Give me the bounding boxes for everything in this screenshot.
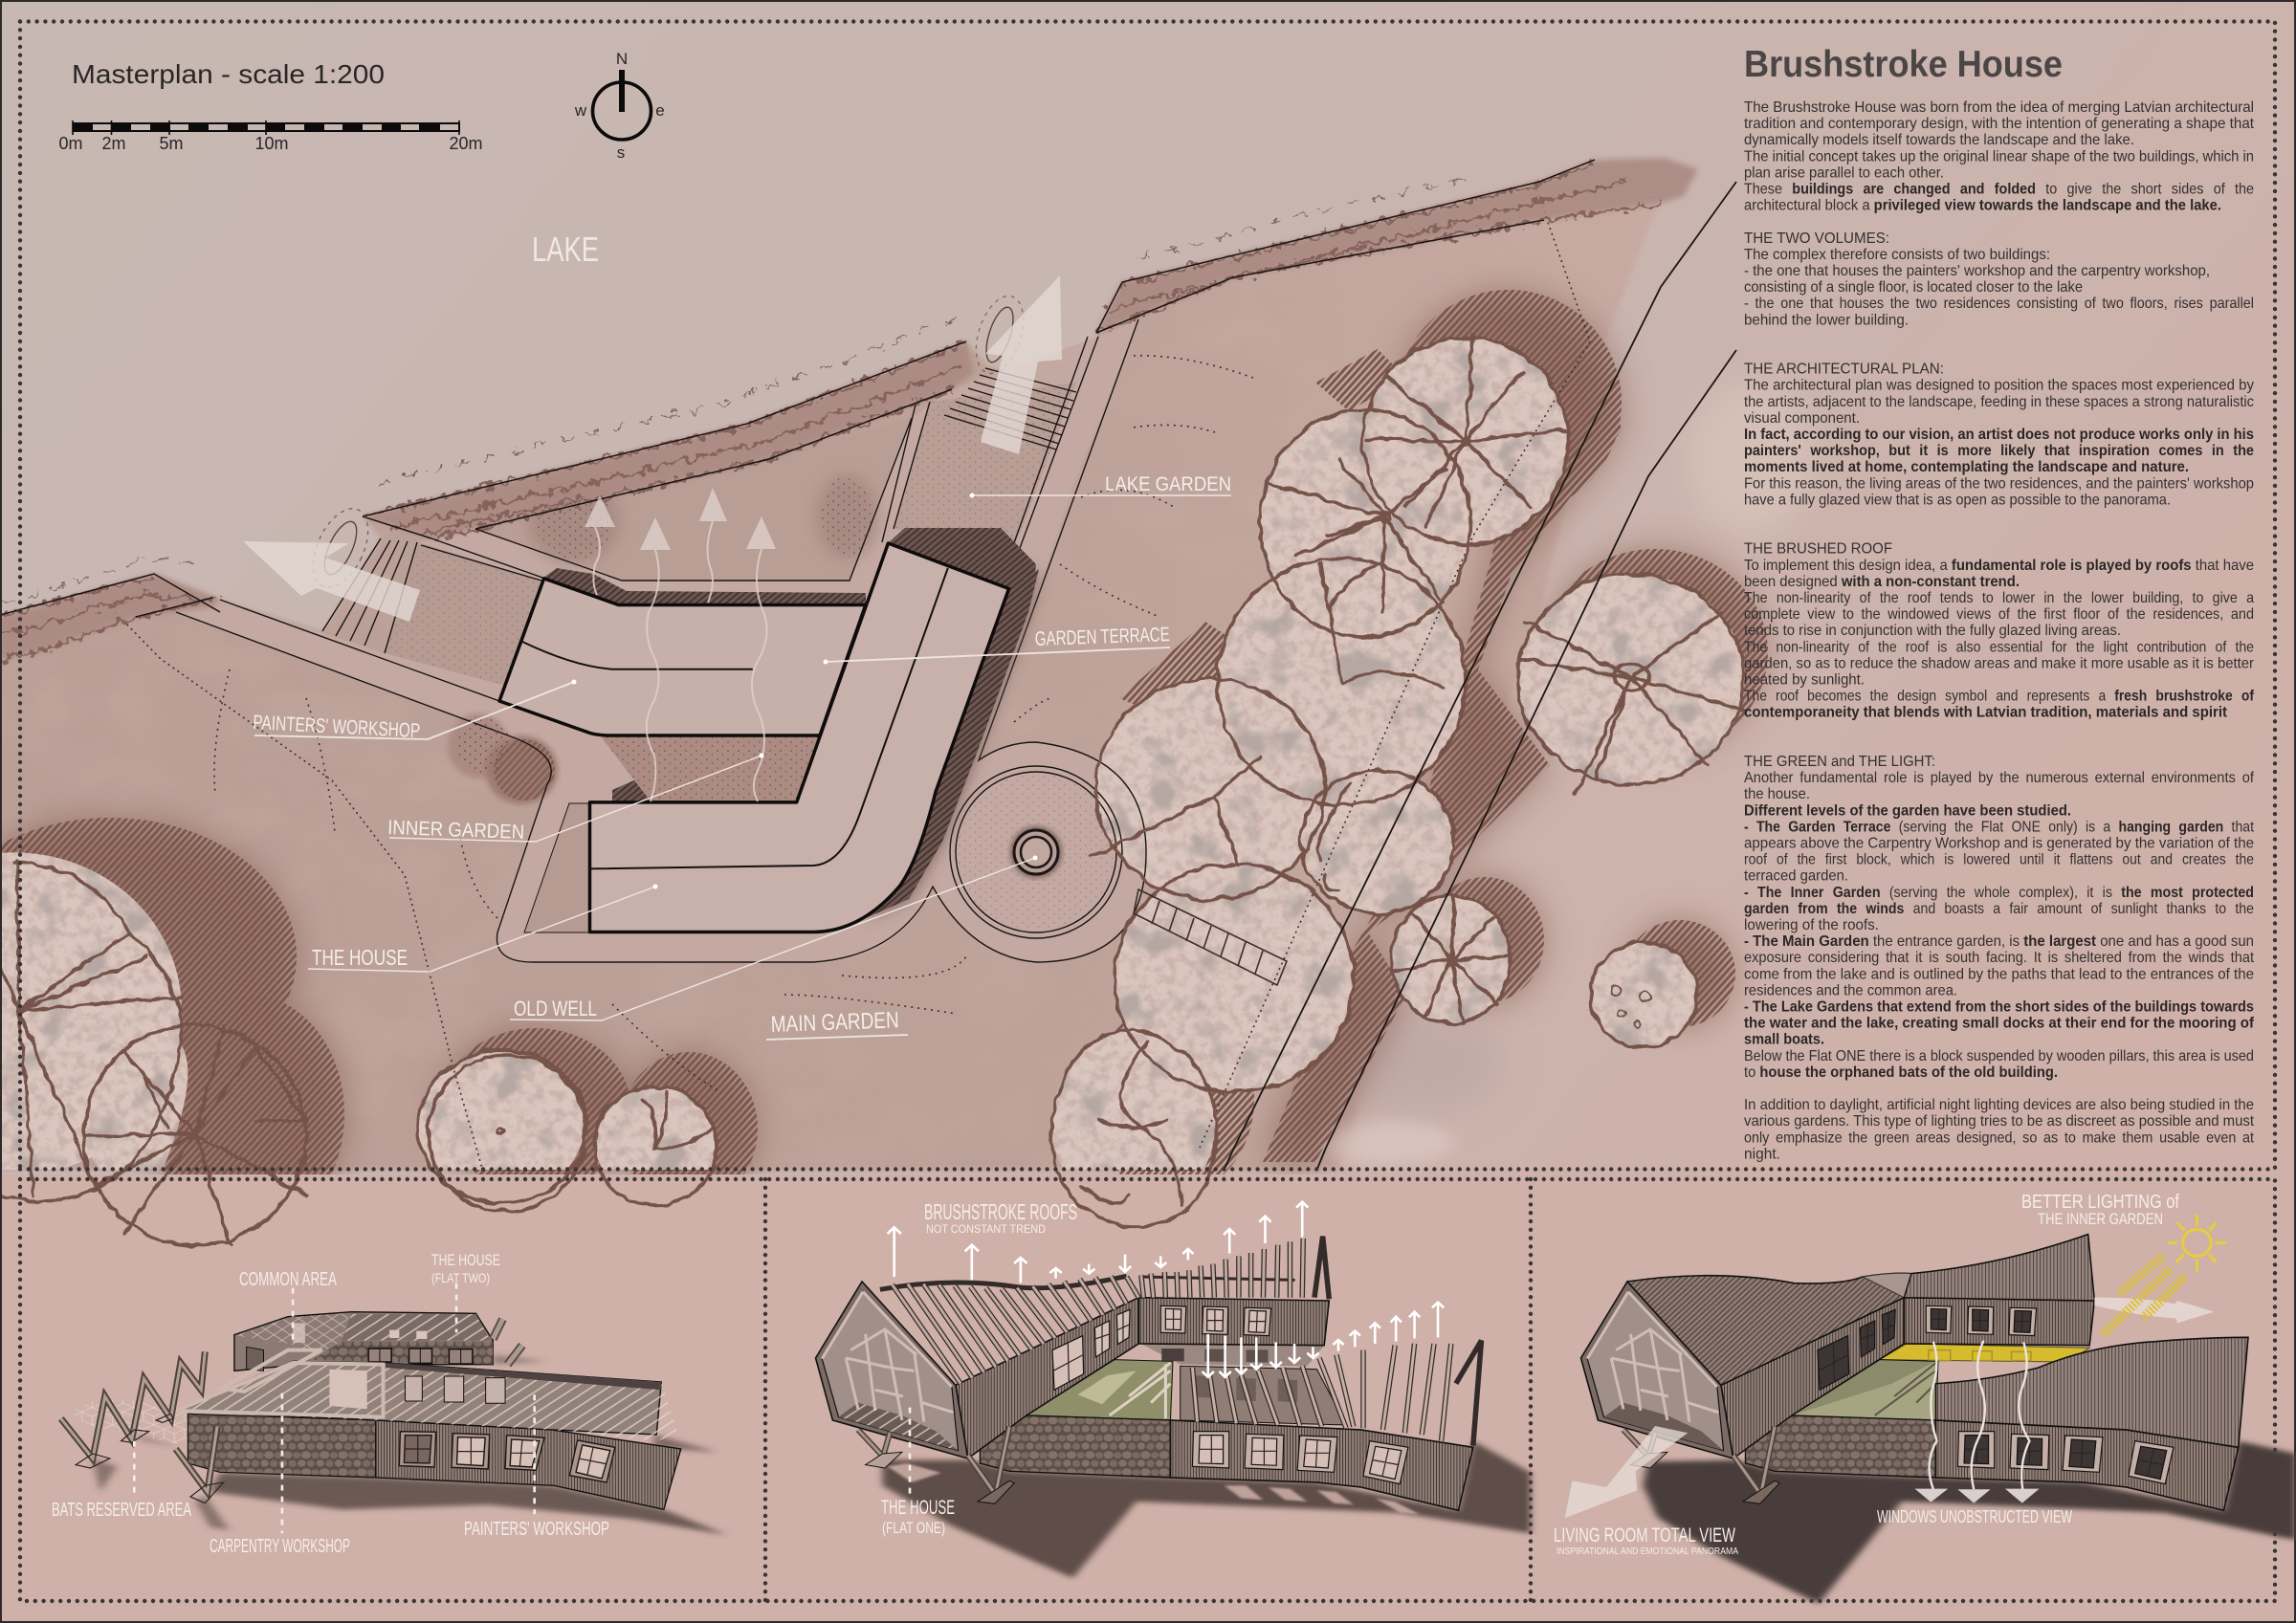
text block: introduction: architectural block a privileged view towards the landscape and the lake. — [1744, 198, 2221, 214]
label: living room total view — [1554, 1524, 1738, 1557]
panel: roof structure — [816, 1199, 1531, 1578]
windows — [399, 1432, 615, 1482]
scale bar: 0m — [58, 134, 83, 153]
label: common area: COMMON AREA — [239, 1269, 337, 1290]
label: bats reserved area: BATS RESERVED AREA — [52, 1500, 191, 1521]
panel: functional axonometric — [52, 1251, 727, 1557]
text block: introduction: The Brushstroke House was born from the idea of merging Latvian architectural — [1744, 99, 2254, 116]
label: lake: LAKE — [532, 230, 599, 269]
text block: the architectural plan: visual component. — [1744, 410, 1860, 427]
label: lake garden: LAKE GARDEN — [1105, 473, 1231, 495]
text block: the two volumes: behind the lower building. — [1744, 312, 1909, 328]
text block: the green and the light: - The Main Garden the entrance garden, is the largest one and has a good sun — [1744, 933, 2254, 950]
bat area hex floor — [68, 1399, 230, 1444]
text block: the architectural plan: the artists, adjacent to the landscape, feeding in these spaces a strong naturalistic — [1744, 394, 2254, 410]
scale bar: 20m — [449, 134, 483, 153]
walls — [1581, 1282, 2239, 1510]
right trees — [1392, 574, 1744, 1047]
text block: the brushed roof: tends to rise in conjunction with the fully glazed living areas. — [1744, 623, 2121, 639]
ground shadow — [1643, 1441, 2296, 1604]
text block: the two volumes: - the one that houses the two residences consisting of two floors, rises parallel — [1744, 296, 2254, 312]
gable floor hatch — [839, 1403, 959, 1451]
label: the house flat two: THE HOUSE — [431, 1251, 500, 1269]
axonometric drawing 2 — [816, 1202, 1531, 1578]
text block: the brushed roof: The roof becomes the design symbol and represents a fresh brushstroke of — [1744, 689, 2255, 705]
label: inner garden: INNER GARDEN — [387, 817, 525, 844]
title: masterplan: Masterplan - scale 1:200 — [72, 59, 385, 89]
label: the house flat two — [431, 1251, 500, 1285]
the house roof — [589, 543, 1009, 932]
text block: the architectural plan: THE ARCHITECTURAL PLAN: — [1744, 362, 1944, 378]
painters' workshop roof — [499, 579, 866, 735]
text block: the two volumes: - the one that houses the painters' workshop and the carpentry workshop, — [1744, 263, 2210, 279]
lake garden washes and bushes — [448, 418, 912, 804]
label: garden terrace — [823, 624, 1170, 664]
label: inner garden — [387, 754, 763, 844]
stone wall and corrugated wall — [188, 1414, 376, 1478]
label: old well: OLD WELL — [514, 997, 597, 1020]
tree foliage — [0, 338, 1744, 1170]
view triangles and wavy lines — [585, 488, 776, 801]
text block: the architectural plan: have a fully glazed view that is as open as possible to the panorama. — [1744, 492, 2171, 508]
panel: light and views — [1554, 1192, 2296, 1604]
roof trend arrows — [888, 1202, 1444, 1377]
label: brushstroke roofs: BRUSHSTROKE ROOFS — [924, 1199, 1077, 1224]
icon: compass: e — [655, 101, 665, 120]
text block: the brushed roof — [1744, 541, 2255, 721]
label: windows unobstructed view: WINDOWS UNOBSTRUCTED VIEW — [1877, 1507, 2072, 1526]
text block: introduction: tradition and contemporary design, with the intention of generating a shape that — [1744, 116, 2255, 132]
soft washes — [1330, 1009, 1502, 1114]
label: the house: THE HOUSE — [312, 945, 408, 970]
scribbled waterline — [0, 177, 1473, 604]
label: painters' workshop — [253, 679, 576, 742]
text block: the brushed roof: been designed with a non-constant trend. — [1744, 574, 2020, 590]
left trees — [0, 861, 717, 1245]
light flow arrow — [2094, 1298, 2214, 1323]
text block: the architectural plan: For this reason, the living areas of the two residences, and the painters' workshop — [1744, 475, 2254, 492]
text block: the architectural plan: moments lived at home, contemplating the landscape and nature. — [1744, 459, 2189, 475]
icon: compass: s — [617, 143, 625, 162]
label: painters' workshop: PAINTERS' WORKSHOP — [253, 712, 421, 742]
text block: the green and the light: the water and the lake, creating small docks at their end for the mooring of — [1744, 1016, 2255, 1032]
text block: introduction — [1744, 99, 2255, 214]
icon: compass — [574, 50, 665, 162]
paths and courtyard pads — [176, 319, 1146, 962]
dashed leaders — [134, 1283, 535, 1533]
text block: the architectural plan: The architectural plan was designed to position the spaces most experienced by — [1744, 378, 2254, 394]
scale bar: 5m — [159, 134, 184, 153]
back wall inner — [1181, 1366, 1346, 1425]
text block: the architectural plan: painters' workshop, but it is more likely that inspiration comes in the — [1744, 443, 2254, 459]
label: the house flat one — [881, 1497, 955, 1537]
text block: the green and the light: terraced garden. — [1744, 868, 1848, 885]
back volume — [234, 1312, 522, 1371]
text block: introduction: dynamically models itself towards the landscape and the lake. — [1744, 132, 2134, 148]
tree shadows — [0, 290, 1768, 1234]
text block: the green and the light: - The Lake Gardens that extend from the short sides of the buildings towards — [1744, 998, 2254, 1016]
text block: the green and the light: lowering of the roofs. — [1744, 917, 1879, 933]
label: better lighting: BETTER LIGHTING of — [2021, 1192, 2179, 1213]
text block: the green and the light: Below the Flat ONE there is a block suspended by wooden pillars, this area is used — [1744, 1048, 2254, 1064]
ground shadow — [882, 1441, 1531, 1578]
lake shore vegetation — [0, 158, 1698, 660]
text block: the green and the light — [1744, 754, 2255, 1081]
text block: the green and the light: - The Inner Garden (serving the whole complex), it is the most protected — [1744, 885, 2254, 901]
text block: the green and the light: - The Garden Terrace (serving the Flat ONE only) is a hanging garden that — [1744, 819, 2254, 835]
sun — [2168, 1215, 2226, 1271]
text block: the green and the light: Different levels of the garden have been studied. — [1744, 802, 2071, 819]
text block: introduction: These buildings are changed and folded to give the short sides of the — [1744, 182, 2254, 197]
text block: the green and the light: small boats. — [1744, 1032, 1824, 1048]
bottom strip background — [0, 1174, 2296, 1623]
text block: the brushed roof: contemporaneity that blends with Latvian tradition, materials and spirit — [1744, 705, 2228, 721]
rafters: back wing — [1141, 1237, 1329, 1299]
text block: the two volumes: The complex therefore consists of two buildings: — [1744, 247, 2050, 263]
living room arrow — [1565, 1426, 1688, 1518]
tree outlines — [0, 335, 1744, 1245]
view wavy lines — [1930, 1341, 2029, 1489]
arrow: view from workshop — [243, 541, 420, 622]
label: carpentry workshop: CARPENTRY WORKSHOP — [210, 1536, 350, 1557]
stepping stones — [1134, 889, 1287, 985]
text block: night lighting: night. — [1744, 1146, 1780, 1162]
text block: night lighting: various gardens. This type of lighting tries to be as discreet as possible and must — [1744, 1113, 2255, 1130]
label: lake garden — [970, 473, 1231, 497]
icon: boats — [302, 290, 1032, 596]
back wall, terrace and yellow band — [1880, 1344, 2089, 1362]
label: garden terrace: GARDEN TERRACE — [1034, 624, 1170, 650]
panel: project description — [1744, 44, 2255, 1162]
text block: the brushed roof: garden, so as to reduce the shadow areas and make it more usable as it is better — [1744, 655, 2255, 671]
text block: the green and the light: come from the lake and is outlined by the paths that lead to the entrances of the — [1744, 966, 2254, 982]
dashed leader — [909, 1408, 911, 1499]
text block: the green and the light: to house the orphaned bats of the old building. — [1744, 1064, 2058, 1081]
label: the house — [308, 884, 658, 972]
ground shadow — [93, 1355, 727, 1535]
text block: introduction: plan arise parallel to each other. — [1744, 164, 1944, 181]
dock stairs and path lines — [176, 319, 1146, 962]
sun rays — [2102, 1256, 2185, 1336]
text block: the architectural plan: In fact, according to our vision, an artist does not produce works only in his — [1744, 427, 2254, 443]
text block: the brushed roof: complete view to the windowed views of the first floor of the residences, and — [1744, 606, 2254, 623]
icon: compass: N — [616, 50, 628, 68]
site boundary lines — [1225, 182, 1736, 1169]
rafters: left wing — [880, 1276, 1138, 1384]
label: the house flat one: THE HOUSE — [881, 1497, 955, 1519]
label: main garden: MAIN GARDEN — [770, 1007, 899, 1038]
text block: the green and the light: residences and the common area. — [1744, 982, 1957, 998]
dotted boundary and thin contour scribbles — [115, 185, 1590, 1172]
text block: the brushed roof: THE BRUSHED ROOF — [1744, 541, 1892, 558]
text block: the two volumes — [1744, 230, 2254, 328]
arrow: view to lake — [981, 275, 1062, 454]
label: better lighting: THE INNER GARDEN — [2038, 1210, 2163, 1228]
label: living room total view: LIVING ROOM TOTAL VIEW — [1554, 1524, 1735, 1546]
label: living room total view: INSPIRATIONAL AND EMOTIONAL PANORAMA — [1556, 1546, 1738, 1557]
label: painters' workshop: PAINTERS' WORKSHOP — [464, 1519, 609, 1540]
scale bar: 2m — [101, 134, 126, 153]
bat pillars — [61, 1351, 217, 1492]
text block: the two volumes: THE TWO VOLUMES: — [1744, 230, 1889, 247]
axonometric drawing 1 — [61, 1283, 727, 1535]
text block: introduction: The initial concept takes up the original linear shape of the two buildings, which in — [1744, 148, 2254, 164]
view arrowheads — [1915, 1489, 2040, 1503]
text block: night lighting: only emphasize the green areas designed, so as to make them usable even at — [1744, 1130, 2254, 1146]
label: better lighting — [2021, 1192, 2179, 1228]
label: brushstroke roofs — [924, 1199, 1077, 1236]
text block: night lighting: In addition to daylight, artificial night lighting devices are also being studied in the — [1744, 1097, 2254, 1113]
heading: brushstroke house: Brushstroke House — [1744, 44, 2063, 85]
text block: the architectural plan — [1744, 362, 2254, 508]
centre group — [1051, 335, 1568, 1227]
scale bar: 10m — [254, 134, 289, 153]
text block: the two volumes: consisting of a single floor, is located closer to the lake — [1744, 279, 2083, 296]
building shadows — [524, 528, 1039, 932]
text block: the green and the light: garden from the winds and boasts a fair amount of sunlight thanks to the — [1744, 901, 2254, 917]
label: the house flat one: (FLAT ONE) — [882, 1519, 945, 1537]
icon: compass: w — [574, 101, 587, 120]
garden terrace — [1027, 1360, 1173, 1420]
text block: the brushed roof: To implement this design idea, a fundamental role is played by roofs that have — [1744, 558, 2254, 574]
label: the house flat two: (FLAT TWO) — [431, 1270, 490, 1285]
scale bar — [58, 121, 483, 153]
well — [958, 774, 1115, 931]
solid roofs — [1627, 1235, 2094, 1385]
label: brushstroke roofs: NOT CONSTANT TREND — [926, 1224, 1046, 1236]
text block: the green and the light: THE GREEN and THE LIGHT: — [1744, 754, 1935, 770]
cut floor — [173, 1361, 661, 1435]
text block: the brushed roof: heated by sunlight. — [1744, 671, 1865, 689]
text block: night lighting — [1744, 1097, 2255, 1162]
rafters: front wing — [1192, 1341, 1481, 1446]
text block: the green and the light: exposure considering that it is south facing. It is sheltered from the winds that — [1744, 950, 2255, 966]
axonometric drawing 3 — [1565, 1215, 2296, 1604]
label: old well — [510, 855, 1037, 1020]
walls — [816, 1282, 1473, 1510]
text block: the green and the light: Another fundamental role is played by the numerous external environments of — [1744, 770, 2255, 786]
text block: the green and the light: appears above the Carpentry Workshop and is generated by the variation of the — [1744, 836, 2254, 851]
panel: masterplan ground — [0, 182, 1813, 1170]
text block: the green and the light: the house. — [1744, 786, 1810, 802]
